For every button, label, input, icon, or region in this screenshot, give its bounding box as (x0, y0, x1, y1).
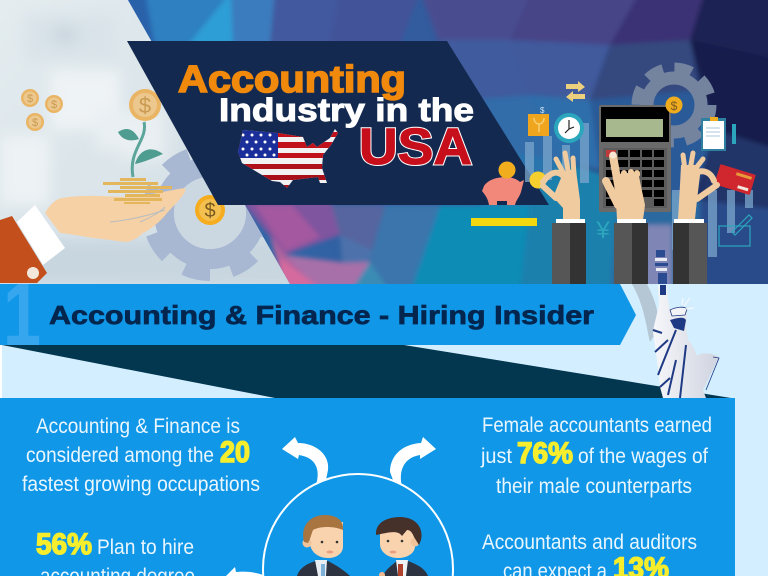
white left edge (0, 344, 2, 398)
icon: small coin on gear: $ (671, 99, 678, 113)
light band below section bar (0, 344, 768, 400)
icon: calculator (599, 105, 671, 212)
torch of statue (655, 250, 668, 284)
icon: credit card (714, 164, 756, 195)
businessman left (297, 515, 350, 576)
open hand with sleeve (0, 188, 185, 283)
icon: shopping bag: $ (540, 106, 545, 115)
businessman right (376, 517, 428, 576)
header background: blurred calculator photo (0, 0, 300, 284)
gold coin (195, 195, 225, 225)
icon: right gear (638, 69, 710, 141)
left text column: Accounting & Finance is (36, 415, 240, 438)
icon: cheque (719, 215, 752, 246)
right text column: their male counterparts (496, 475, 692, 498)
header background: low-poly panel (120, 0, 768, 292)
icon: shopping bag (528, 106, 549, 136)
section header bar (0, 284, 636, 345)
plant with coin growing from hand (118, 89, 163, 177)
arrow: upper left (282, 437, 328, 485)
gold bars on palm (103, 178, 172, 204)
big section number: 1 (3, 265, 41, 365)
icon: small coin on gear (666, 96, 682, 114)
left text column: fastest growing occupations (22, 473, 260, 496)
right text column: 76% (517, 437, 573, 470)
icon: left hand (543, 153, 586, 284)
floating dollar coins: $ (27, 93, 33, 105)
background bar charts (525, 123, 753, 257)
icon: middle hand (606, 152, 648, 284)
title text: Accounting (178, 59, 406, 101)
title text: Industry in the (219, 92, 474, 128)
icon: clipboard (701, 117, 736, 151)
gold coin: $ (204, 200, 216, 222)
title text: USA (359, 118, 472, 175)
circle outline (263, 474, 453, 576)
left text column: 20 (220, 436, 250, 469)
right text column: Female accountants earned (482, 414, 712, 437)
plant with coin growing from hand: $ (139, 93, 151, 118)
floating dollar coins (21, 89, 63, 131)
statue of liberty (632, 284, 719, 398)
dark slanted band (2, 345, 731, 398)
right light background (620, 284, 768, 576)
right text column: of the wages of (578, 445, 708, 468)
right text column (480, 414, 712, 576)
icon: piggy bank (482, 162, 524, 205)
left gear illustration (150, 153, 270, 273)
arrow: upper right (390, 437, 436, 486)
title banner (127, 41, 549, 205)
main blue panel (0, 398, 735, 576)
right text column: Accountants and auditors (482, 531, 697, 554)
left text column: Plan to hire (97, 536, 194, 559)
title text: USA (359, 118, 472, 175)
section heading: Accounting & Finance - Hiring Insider (49, 300, 594, 330)
right text column: just (480, 445, 512, 468)
icon: clock (554, 113, 584, 143)
icon: yen sign: ¥ (595, 217, 610, 244)
icon: right hand (673, 153, 717, 284)
icon: coin held by hand (530, 172, 546, 188)
icon: swap arrows (566, 81, 585, 102)
left text column: considered among the (26, 444, 214, 467)
arrow: lower left (226, 567, 263, 576)
floating dollar coins: $ (32, 117, 38, 129)
left text column (22, 415, 260, 576)
left text column: 56% (36, 528, 92, 561)
icon: USA flag map (238, 129, 338, 188)
icon: yellow ruler (471, 218, 537, 226)
floating dollar coins: $ (51, 99, 57, 111)
title text (178, 59, 474, 175)
